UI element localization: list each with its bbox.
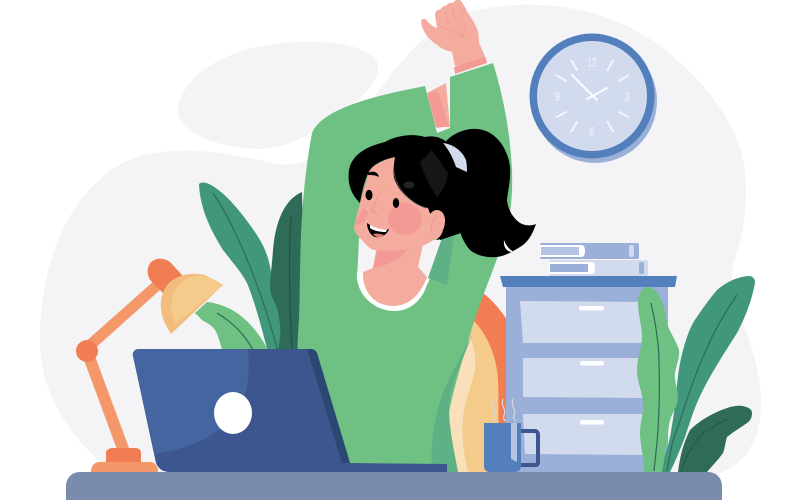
neck gap bbox=[357, 238, 442, 284]
drawer 1 bbox=[520, 301, 650, 343]
lamp arm lower bbox=[81, 348, 129, 452]
laptop logo bbox=[214, 392, 252, 434]
mug bbox=[484, 399, 538, 472]
leaf: green right bbox=[637, 287, 679, 472]
lamp shade light bbox=[171, 276, 223, 324]
ponytail tip highlight bbox=[504, 240, 514, 252]
drawer 2 bbox=[523, 358, 650, 398]
plant: right bbox=[637, 276, 755, 472]
hair tie bbox=[443, 143, 467, 172]
arm shade bbox=[428, 236, 454, 285]
neck bbox=[363, 240, 427, 306]
clock hands bbox=[572, 75, 607, 100]
lamp base cap bbox=[106, 448, 141, 462]
lamp shade dark bbox=[161, 274, 223, 334]
background blob: upper left bbox=[178, 42, 378, 149]
teeth bbox=[370, 225, 387, 232]
clock ticks bbox=[557, 60, 628, 131]
clock bbox=[530, 34, 657, 163]
steam bbox=[492, 399, 516, 421]
leaf: dark bbox=[270, 192, 305, 352]
eyes bbox=[366, 190, 372, 200]
hair strand bbox=[394, 172, 426, 208]
clock numerals: 6 bbox=[590, 124, 595, 138]
mug highlight bbox=[511, 423, 517, 462]
wrist cuff bbox=[454, 57, 487, 74]
woman bbox=[297, 0, 536, 472]
leaf: teal bbox=[199, 183, 282, 352]
lamp head neck bbox=[148, 259, 183, 295]
ear crease bbox=[431, 216, 437, 232]
neck shadow bbox=[373, 248, 409, 268]
drawer handles bbox=[579, 306, 604, 424]
desk lamp bbox=[76, 259, 223, 472]
lower forearm bbox=[427, 83, 450, 127]
face bbox=[354, 155, 440, 251]
collar bbox=[357, 272, 428, 311]
finger creases bbox=[445, 5, 464, 24]
book: lower bbox=[549, 260, 648, 276]
face side shade bbox=[355, 208, 369, 225]
hair sheen bbox=[404, 182, 414, 188]
vein dark right bbox=[681, 419, 727, 471]
green sweater bbox=[297, 63, 512, 472]
clock numerals: 3 bbox=[624, 90, 630, 104]
desk bbox=[66, 472, 722, 500]
clock numerals: 9 bbox=[555, 90, 560, 104]
plant: back left leaves bbox=[195, 183, 305, 352]
cheek bbox=[388, 203, 422, 235]
chair pale panel bbox=[449, 337, 475, 472]
mug handle bbox=[516, 431, 538, 465]
palm crease bbox=[440, 24, 466, 37]
clock numerals: 12 bbox=[588, 56, 597, 70]
clock numerals bbox=[555, 56, 630, 138]
hair highlight bbox=[420, 150, 448, 197]
drawer 3 bbox=[523, 414, 650, 455]
lamp joint bbox=[76, 340, 98, 362]
leaf: light green bbox=[195, 302, 268, 350]
tongue bbox=[373, 234, 384, 237]
hair front bbox=[349, 135, 470, 240]
mouth bbox=[367, 223, 389, 237]
leaf vein dark bbox=[289, 215, 292, 350]
book: upper bbox=[540, 243, 639, 259]
chair bbox=[449, 293, 526, 472]
leaf vein light bbox=[217, 313, 253, 350]
raised hand bbox=[421, 0, 487, 66]
mug body bbox=[484, 423, 521, 472]
lamp base bbox=[91, 462, 158, 472]
ponytail bbox=[430, 129, 536, 257]
filing cabinet bbox=[500, 243, 677, 472]
vein green right bbox=[651, 303, 659, 471]
clock rim bbox=[530, 34, 654, 158]
laptop lid bbox=[133, 349, 447, 472]
laptop edge shade bbox=[307, 349, 350, 463]
chair yellow panel bbox=[450, 320, 498, 472]
laptop bbox=[133, 349, 447, 472]
forearm shade bbox=[428, 92, 449, 128]
leaf: teal right bbox=[660, 276, 755, 472]
laptop light panel bbox=[133, 349, 249, 454]
leaf: dark right bbox=[678, 406, 752, 472]
eyebrow bbox=[368, 172, 379, 177]
leaf vein bbox=[213, 193, 278, 352]
cabinet top bbox=[500, 276, 677, 287]
sweater side shade bbox=[431, 335, 472, 472]
clock face bbox=[537, 41, 647, 151]
vein teal right bbox=[667, 295, 737, 471]
nose shade bbox=[370, 185, 385, 218]
lamp arm upper bbox=[83, 280, 160, 351]
clock shadow bbox=[533, 39, 657, 163]
ear bbox=[426, 210, 445, 240]
chair back orange bbox=[450, 293, 526, 472]
cabinet body bbox=[506, 287, 668, 472]
